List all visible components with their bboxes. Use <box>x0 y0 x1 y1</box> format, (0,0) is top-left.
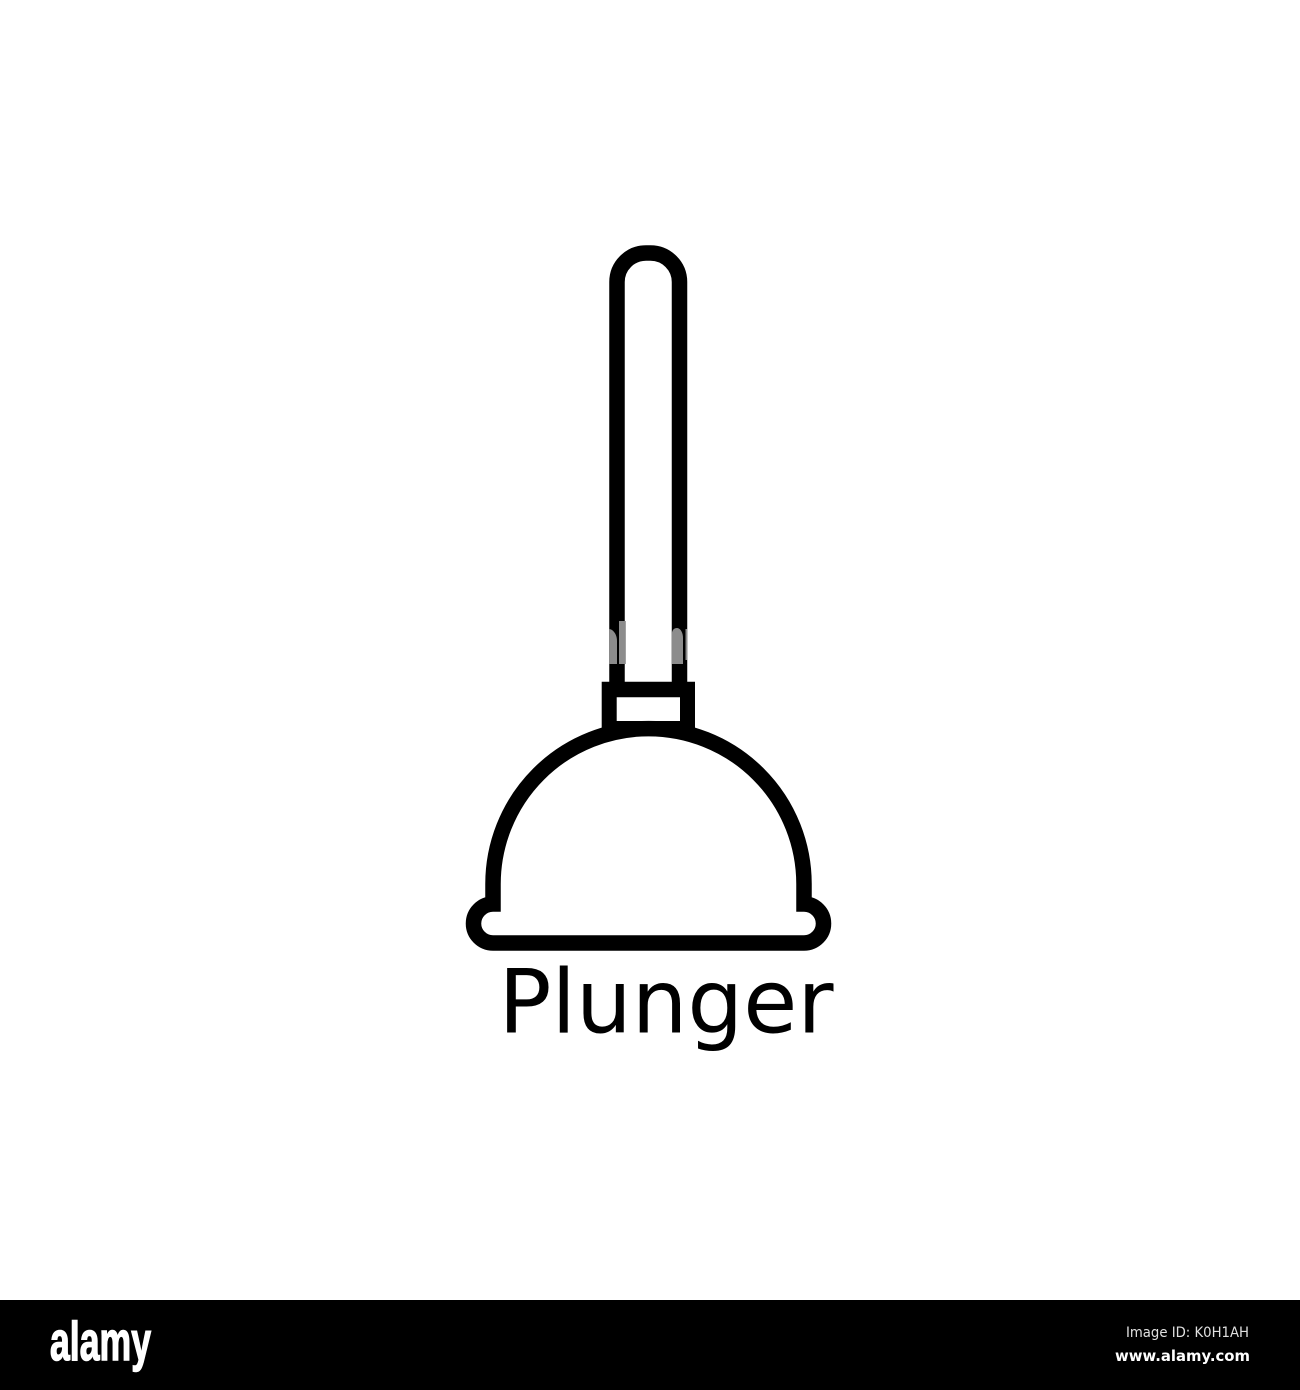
plunger handle <box>617 253 680 683</box>
caption: Plunger: Plunger <box>498 950 834 1054</box>
watermark traces on handle <box>609 621 687 664</box>
footer band <box>0 1300 1300 1390</box>
plunger collar <box>602 682 695 730</box>
plunger cup <box>474 729 824 943</box>
footer logo: alamy: alamy <box>50 1310 151 1372</box>
website: www.alamy.com <box>1115 1347 1250 1365</box>
icon: plunger <box>474 253 824 943</box>
image ID: Image ID: K0H1AH <box>1126 1325 1249 1341</box>
